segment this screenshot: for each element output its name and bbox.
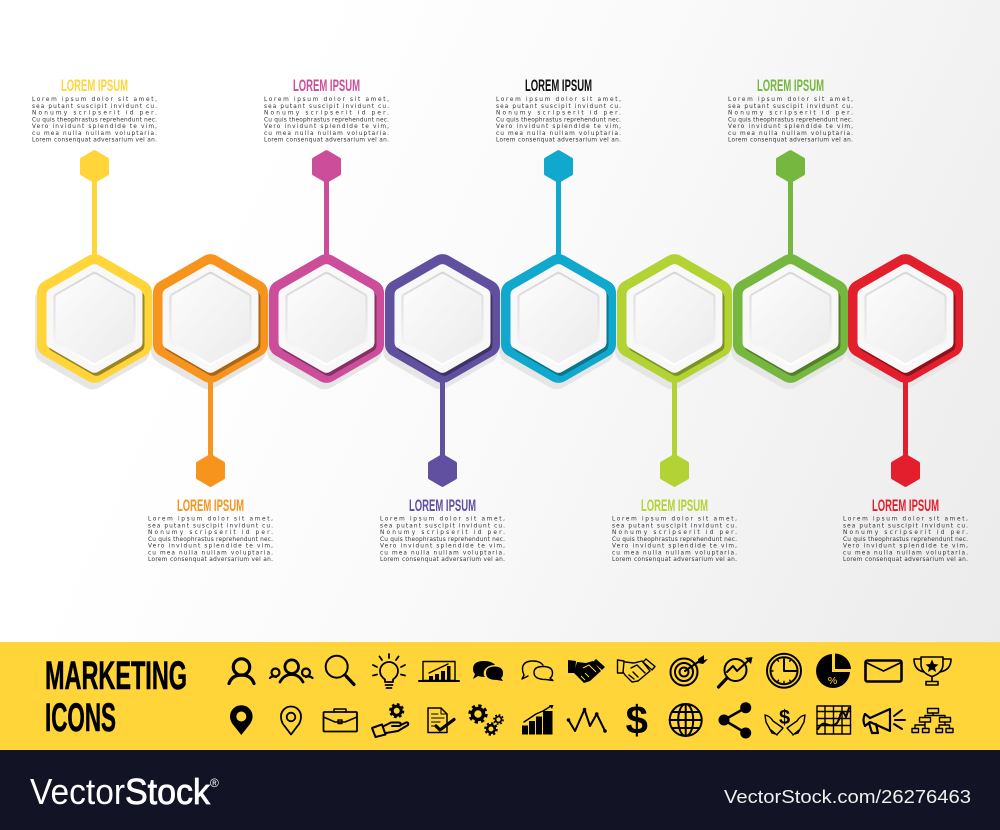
text block: magenta step: Nonumy scripserit id per. <box>264 110 389 116</box>
icon: filled location pin <box>230 705 253 735</box>
icon: share nodes <box>718 702 751 738</box>
text block: magenta step: sea putant suscipit invidunt cu. <box>264 104 389 110</box>
footer logo: VectorStock: ® <box>210 776 219 790</box>
text block: green step: Cu quis theophrastus reprehendunt nec. <box>728 117 853 123</box>
text block: yellow step: Lorem consenquat adversarium vel an. <box>32 138 157 144</box>
text block: green step: Nonumy scripserit id per. <box>728 110 853 116</box>
text block: magenta step: Cu quis theophrastus reprehendunt nec. <box>264 117 389 123</box>
text block: red step: Cu quis theophrastus reprehendunt nec. <box>843 537 968 543</box>
step 2: orange hexagon with bottom connector <box>166 267 255 485</box>
text block: green step <box>728 76 853 144</box>
text block: cyan step: Nonumy scripserit id per. <box>496 110 621 116</box>
text block: green step: sea putant suscipit invidunt cu. <box>728 104 853 110</box>
icon: light bulb <box>373 654 405 688</box>
icon: pie chart with percent <box>816 654 851 688</box>
text block: red step: LOREM IPSUM <box>872 496 939 515</box>
text block: green step: LOREM IPSUM <box>757 76 824 95</box>
text block: lime step: cu mea nulla nullam voluptaria. <box>612 550 737 556</box>
icon: trophy <box>914 657 951 685</box>
text block: orange step <box>148 496 273 563</box>
text block: cyan step: Vero invidunt splendide te vim, <box>496 124 621 130</box>
panel: footer bar <box>0 750 1000 830</box>
footer image id: VectorStock.com/26276463 <box>724 786 971 807</box>
text block: purple step: Cu quis theophrastus reprehendunt nec. <box>380 537 505 543</box>
hexagon drop shadows <box>48 274 948 376</box>
text block: orange step: LOREM IPSUM <box>177 496 244 515</box>
icon: rising bar chart <box>522 705 554 734</box>
text block: purple step: Vero invidunt splendide te vim, <box>380 544 505 550</box>
text block: orange step: Lorem consenquat adversarium vel an. <box>148 557 273 563</box>
text block: yellow step: Nonumy scripserit id per. <box>32 110 157 116</box>
text block: purple step: LOREM IPSUM <box>409 496 476 515</box>
heading: marketing icons: MARKETING <box>45 654 187 698</box>
step 6: lime hexagon with bottom connector <box>630 267 719 485</box>
text block: cyan step: Lorem ipsum dolor sit amet, <box>496 97 621 103</box>
icon: grid line chart <box>817 706 850 734</box>
text block: lime step: sea putant suscipit invidunt cu. <box>612 523 737 529</box>
icon: zigzag line <box>567 708 607 733</box>
panel: marketing icons band <box>0 642 1000 750</box>
text block: lime step <box>612 496 737 563</box>
text block: lime step: Cu quis theophrastus reprehendunt nec. <box>612 537 737 543</box>
text block: orange step: Lorem ipsum dolor sit amet, <box>148 516 273 522</box>
text block: purple step: Nonumy scripserit id per. <box>380 530 505 536</box>
text block: magenta step: cu mea nulla nullam voluptaria. <box>264 131 389 137</box>
text block: cyan step: Lorem consenquat adversarium vel an. <box>496 138 621 144</box>
text block: cyan step: cu mea nulla nullam voluptaria. <box>496 131 621 137</box>
icon: filled chat bubbles <box>473 661 503 681</box>
icon: magnifier <box>326 656 354 684</box>
text block: lime step: Vero invidunt splendide te vim, <box>612 544 737 550</box>
footer logo: VectorStock <box>30 771 219 812</box>
text block: yellow step: sea putant suscipit invidunt cu. <box>32 104 157 110</box>
text block: red step: Lorem consenquat adversarium vel an. <box>843 557 968 563</box>
text block: yellow step <box>32 76 157 144</box>
icon: clock <box>767 654 801 688</box>
text block: yellow step: cu mea nulla nullam voluptaria. <box>32 131 157 137</box>
text block: yellow step: LOREM IPSUM <box>61 76 128 95</box>
text block: cyan step: LOREM IPSUM <box>525 76 592 95</box>
text block: purple step <box>380 496 505 563</box>
text block: purple step: Lorem ipsum dolor sit amet, <box>380 516 505 522</box>
icon: pie chart with percent: % <box>828 675 837 687</box>
icon: globe <box>670 704 702 736</box>
text block: red step: cu mea nulla nullam voluptaria. <box>843 550 968 556</box>
text block: orange step: Cu quis theophrastus reprehendunt nec. <box>148 537 273 543</box>
text block: purple step: sea putant suscipit invidunt cu. <box>380 523 505 529</box>
text block: red step: Nonumy scripserit id per. <box>843 530 968 536</box>
step 5: cyan hexagon with top connector <box>514 152 603 370</box>
icon: hands holding dollar <box>765 707 805 735</box>
icon: envelope <box>866 660 902 682</box>
step 1: yellow hexagon with top connector <box>50 152 139 370</box>
text block: green step: Vero invidunt splendide te vim, <box>728 124 853 130</box>
text block: magenta step <box>264 76 389 144</box>
text block: lime step: Lorem consenquat adversarium vel an. <box>612 557 737 563</box>
text block: green step: Lorem consenquat adversarium vel an. <box>728 138 853 144</box>
text block: orange step: cu mea nulla nullam voluptaria. <box>148 550 273 556</box>
step 3: magenta hexagon with top connector <box>282 152 371 370</box>
text block: lime step: LOREM IPSUM <box>641 496 708 515</box>
text block: red step: sea putant suscipit invidunt cu. <box>843 523 968 529</box>
heading: marketing icons: ICONS <box>45 696 116 740</box>
text block: magenta step: Lorem ipsum dolor sit amet, <box>264 97 389 103</box>
step 7: green hexagon with top connector <box>746 152 835 370</box>
text block: magenta step: Vero invidunt splendide te vim, <box>264 124 389 130</box>
text block: cyan step: sea putant suscipit invidunt cu. <box>496 104 621 110</box>
icon: laptop with chart <box>419 662 459 681</box>
text block: purple step: cu mea nulla nullam voluptaria. <box>380 550 505 556</box>
icon: gears <box>470 706 503 735</box>
text block: purple step: Lorem consenquat adversarium vel an. <box>380 557 505 563</box>
text block: orange step: sea putant suscipit invidunt cu. <box>148 523 273 529</box>
text block: yellow step: Cu quis theophrastus reprehendunt nec. <box>32 117 157 123</box>
text block: cyan step: Cu quis theophrastus reprehendunt nec. <box>496 117 621 123</box>
icon: outline location pin <box>281 706 301 734</box>
text block: orange step: Vero invidunt splendide te vim, <box>148 544 273 550</box>
icon: hands holding dollar: $ <box>779 707 790 729</box>
step 4: purple hexagon with bottom connector <box>398 267 487 485</box>
icon: team <box>270 660 312 682</box>
icon: megaphone <box>864 709 905 733</box>
icon: outline chat bubbles <box>522 661 553 680</box>
icon: person <box>229 659 254 684</box>
text block: red step <box>843 496 968 563</box>
text block: red step: Lorem ipsum dolor sit amet, <box>843 516 968 522</box>
icon: briefcase <box>324 709 357 732</box>
icon: outline handshake <box>618 659 655 682</box>
text block: red step: Vero invidunt splendide te vim, <box>843 544 968 550</box>
text block: cyan step <box>496 76 621 144</box>
icon: hand with gear <box>372 704 408 737</box>
heading: marketing icons <box>45 654 187 740</box>
icon: dollar sign: $ <box>626 698 648 742</box>
icon: filled handshake <box>568 659 605 683</box>
footer logo: VectorStock: Vector <box>30 771 125 812</box>
text block: magenta step: Lorem consenquat adversarium vel an. <box>264 138 389 144</box>
text block: lime step: Nonumy scripserit id per. <box>612 530 737 536</box>
step 8: red hexagon with bottom connector <box>861 267 950 485</box>
text block: orange step: Nonumy scripserit id per. <box>148 530 273 536</box>
text block: green step: cu mea nulla nullam voluptaria. <box>728 131 853 137</box>
footer logo: VectorStock: Stock <box>125 771 211 812</box>
icon: document with check <box>428 708 454 732</box>
text block: yellow step: Vero invidunt splendide te vim, <box>32 124 157 130</box>
icon: organisation chart <box>912 708 953 732</box>
icon: growth magnifier <box>718 657 752 687</box>
text block: lime step: Lorem ipsum dolor sit amet, <box>612 516 737 522</box>
text block: yellow step: Lorem ipsum dolor sit amet, <box>32 97 157 103</box>
text block: magenta step: LOREM IPSUM <box>293 76 360 95</box>
icon: target with arrow <box>670 655 708 686</box>
text block: green step: Lorem ipsum dolor sit amet, <box>728 97 853 103</box>
